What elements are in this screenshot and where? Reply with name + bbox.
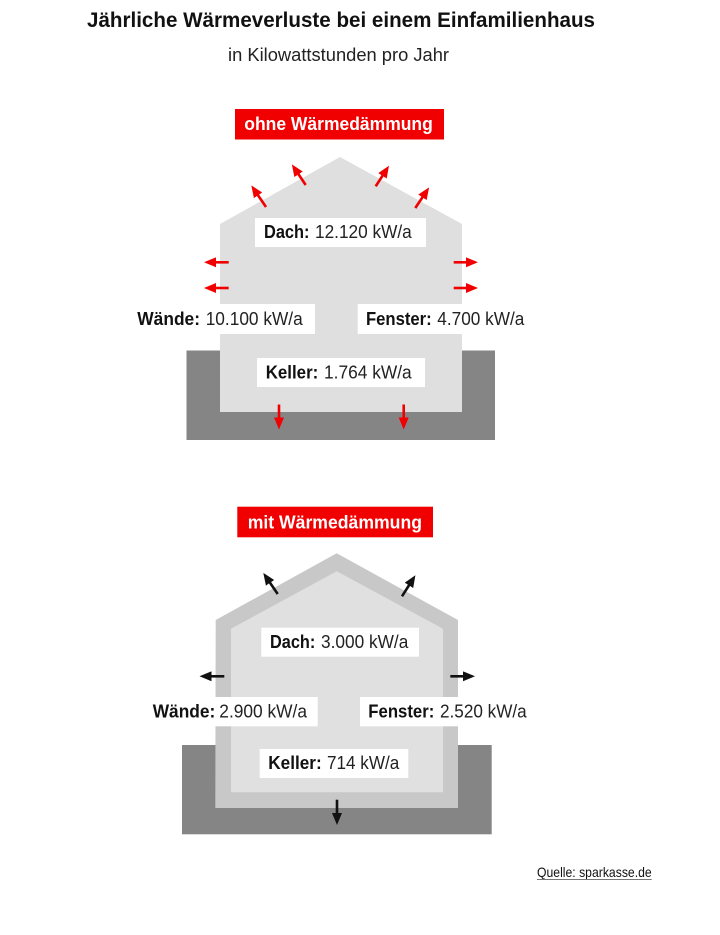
panel: ohne Wärmedämmung <box>137 109 525 440</box>
arrows: red heat loss <box>215 174 467 418</box>
arrows: black heat loss <box>210 582 464 814</box>
label: Keller <box>260 749 408 778</box>
house <box>220 157 462 412</box>
ground <box>186 350 495 440</box>
subtitle: in Kilowattstunden pro Jahr <box>228 45 449 65</box>
label: Wände: 10.100 kW/a <box>206 309 304 329</box>
label: Dach <box>255 218 426 247</box>
label: Fenster: Fenster: <box>368 701 434 721</box>
panel: mit Wärmedämmung <box>152 507 528 834</box>
badge: ohne Wärmedämmung <box>235 109 444 140</box>
label: Dach: 3.000 kW/a <box>321 632 409 652</box>
label: Wände: 2.900 kW/a <box>219 701 308 721</box>
label: Fenster <box>358 304 525 334</box>
label: Wände <box>152 697 318 726</box>
label: Keller: 1.764 kW/a <box>324 362 413 382</box>
label: Keller: 714 kW/a <box>327 753 400 773</box>
title: Jährliche Wärmeverluste bei einem Einfamilienhaus <box>87 8 595 32</box>
badge: mit Wärmedämmung: mit Wärmedämmung <box>248 512 422 532</box>
house interior <box>231 571 443 792</box>
label: Keller: Keller: <box>268 753 322 773</box>
label: Dach: Dach: <box>270 632 315 652</box>
label: Dach: Dach: <box>264 222 310 242</box>
label: Fenster <box>360 697 528 726</box>
label: Fenster: Fenster: <box>366 309 432 329</box>
label: Dach <box>261 628 419 657</box>
badge: mit Wärmedämmung <box>237 507 433 537</box>
label: Keller: Keller: <box>266 362 318 382</box>
label: Wände: Wände: <box>153 701 215 721</box>
label: Keller <box>257 358 425 387</box>
source: Quelle: sparkasse.de <box>537 864 652 880</box>
label: Fenster: 4.700 kW/a <box>437 309 525 329</box>
label: Fenster: 2.520 kW/a <box>440 701 528 721</box>
label: Wände <box>137 304 315 334</box>
label: Dach: 12.120 kW/a <box>315 222 413 242</box>
house insulation <box>215 553 458 808</box>
label: Wände: Wände: <box>137 309 200 329</box>
badge: ohne Wärmedämmung: ohne Wärmedämmung <box>244 114 433 134</box>
ground <box>182 745 492 834</box>
